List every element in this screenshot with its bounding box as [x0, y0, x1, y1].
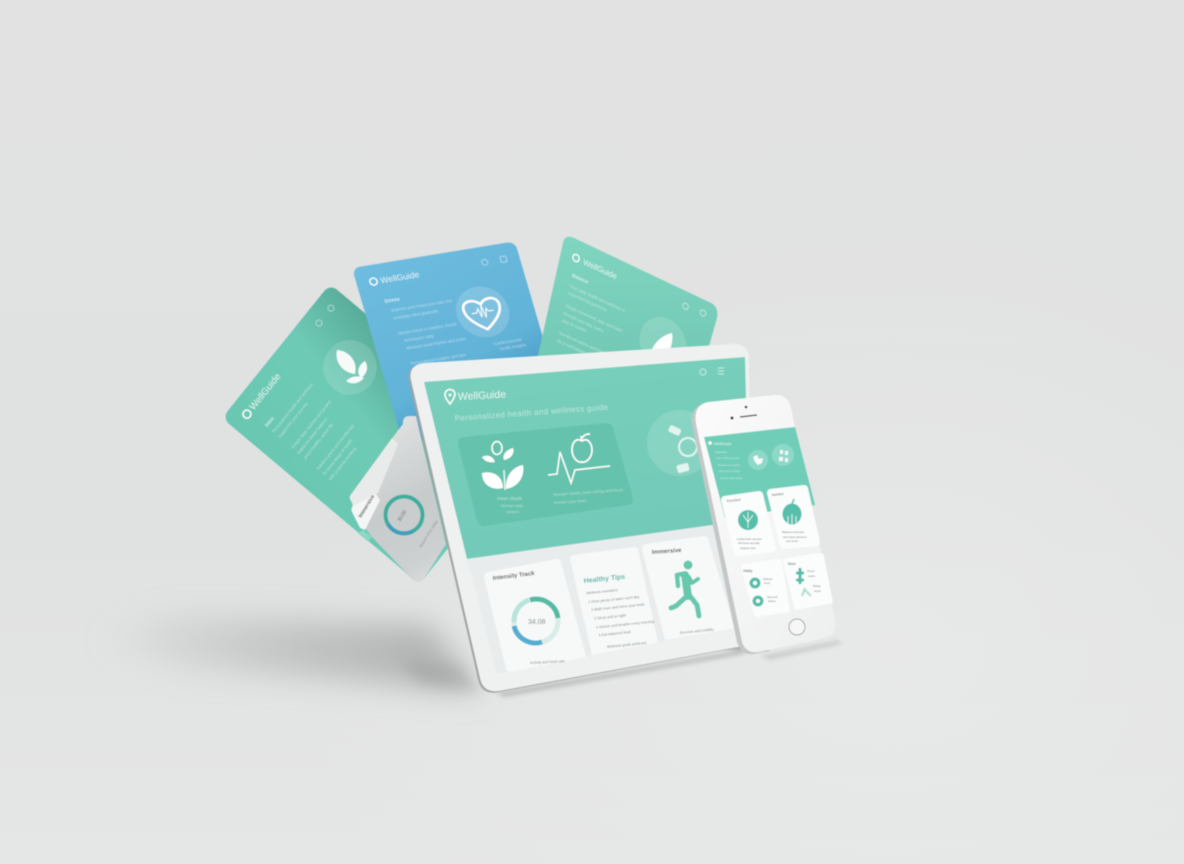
icon: leaf	[651, 333, 672, 354]
plant caption: balance	[506, 510, 519, 514]
phone card: activity: Fitness	[807, 570, 815, 573]
text block: Intro	[264, 416, 276, 428]
icon circle	[635, 309, 691, 378]
phone header text: Heart and nutrition	[719, 469, 741, 473]
text block: techniques daily	[403, 333, 435, 343]
text block: Your daily health and wellness is	[569, 283, 625, 313]
home button	[789, 619, 805, 635]
logo: WellGuide	[582, 257, 618, 281]
phone card: activity: stretch	[814, 590, 822, 593]
tips list: 3 Sleep well at night	[594, 613, 626, 621]
tablet side edge	[409, 345, 750, 693]
phone card: activity: Mobility	[813, 585, 822, 588]
tablet screen: lower area	[467, 520, 749, 674]
text block: Nutrition plans and mindful tips	[315, 423, 355, 471]
text block	[264, 376, 370, 481]
text block: Improve your mood and calm the	[391, 298, 453, 313]
progress ring	[386, 496, 422, 534]
text block	[557, 273, 630, 369]
icon: heart with pulse	[450, 283, 516, 341]
progress ring: 30:00	[397, 509, 408, 523]
phone side edge	[692, 402, 770, 654]
icon: runner	[671, 560, 699, 616]
panel: runner card	[642, 536, 735, 640]
text block: support for your journey	[277, 400, 309, 439]
tips list: 4 Stretch and breathe every morning	[596, 619, 654, 630]
icon: leaves	[336, 350, 367, 383]
heading: Personalized health and wellness guide	[454, 402, 609, 423]
phone header text: Overview	[715, 450, 728, 454]
tips list: Wellness reminders	[586, 588, 618, 595]
tablet body	[411, 344, 752, 691]
phone card: apple: Nutrition	[772, 492, 784, 497]
phone card: activity	[783, 553, 833, 610]
phone card: apple: and recipes tailored to	[783, 536, 807, 539]
icon: plant	[482, 442, 523, 490]
caption: Activity and heart rate	[530, 659, 565, 665]
text block: to improve your health	[412, 362, 455, 374]
text block: with coaching	[415, 372, 442, 381]
small icons	[315, 304, 335, 327]
icon: apple and pulse	[548, 434, 610, 483]
tips list: 1 Drink plenty of water each day	[588, 595, 640, 604]
panel: tips card: Healthy Tips	[583, 574, 626, 585]
caption	[493, 336, 527, 352]
text block: Personalized insights and tips	[410, 352, 466, 366]
plant caption: Nourish daily	[501, 504, 523, 508]
phone card: weights	[741, 559, 790, 617]
phone card: heart	[721, 491, 776, 556]
tips list: 2 Walk more and move your body	[591, 602, 645, 612]
phone card: weights: check	[764, 583, 771, 585]
white tab	[351, 494, 380, 530]
logo	[572, 253, 618, 281]
text block: Stress	[384, 296, 401, 305]
phone card: heart: progress notes	[740, 547, 757, 550]
plant caption: Inner check	[497, 496, 522, 502]
phone header text: Routine summaries	[718, 463, 741, 467]
text block: with progress tracking	[328, 446, 357, 481]
phone header text: Activity goals today	[720, 476, 743, 480]
text block: step of routine	[562, 317, 587, 334]
logo: WellGuide	[379, 269, 421, 285]
tips list: 5 Eat balanced food	[599, 630, 631, 637]
small icons	[481, 256, 507, 266]
pulse caption: Stronger vitality, more energy and focus	[553, 487, 623, 497]
phone card: weights: balance	[768, 601, 777, 603]
panel: donut card	[484, 559, 586, 672]
text block: for a well balanced lifestyle	[557, 338, 604, 364]
phone header text: Daily wellness guide	[716, 456, 740, 460]
phone	[692, 395, 836, 654]
panel: right green card	[537, 237, 717, 401]
phone card: apple	[767, 485, 820, 549]
tablet	[409, 344, 752, 693]
tips list	[586, 585, 655, 638]
phone card: activity: routine	[808, 575, 816, 578]
text block	[384, 288, 476, 383]
phone card: weights: Vitality	[743, 569, 753, 573]
upper sheet	[350, 438, 398, 507]
text block: Measure heart rhythm and pulse	[406, 336, 467, 350]
pulse caption	[553, 487, 623, 505]
text block: Simple check-in routines, breath	[397, 321, 458, 336]
pulse caption: monitor your heart	[554, 498, 587, 505]
phone card: activity: Move	[788, 562, 796, 566]
ground shadows	[95, 615, 842, 697]
icon: dumbbell circle	[647, 410, 713, 476]
panel: tips card	[570, 547, 658, 655]
title: Immersive	[358, 494, 376, 519]
text block: Simple daily routines and guided	[290, 399, 332, 450]
phone card: heart: Exercises	[727, 498, 741, 503]
phone card: heart: with timers and daily	[738, 542, 760, 545]
text block: Personalized health and wellness	[271, 382, 314, 434]
caption: Exercise and mobility	[680, 627, 714, 635]
phone screen header	[704, 427, 815, 518]
logo	[241, 371, 283, 421]
text block: Balance	[572, 273, 589, 285]
panel: donut card: Intensity Track	[493, 571, 536, 582]
logo: WellGuide	[248, 371, 283, 413]
header icons	[700, 368, 724, 375]
panel: blue card	[352, 241, 566, 444]
phone card: apple: your needs	[786, 540, 799, 543]
caption: health insights	[499, 342, 527, 351]
speaker and camera	[730, 406, 757, 420]
phone header circles	[748, 444, 794, 470]
teal corner	[358, 530, 372, 541]
text block: supported by guidance	[568, 290, 608, 313]
text block: Simple movement, plan and track	[565, 303, 623, 334]
phone header text	[715, 450, 743, 480]
caption: Cardiovascular	[493, 337, 523, 346]
donut chart	[514, 599, 558, 643]
plant caption	[497, 496, 523, 514]
phone card: weights: Wellness	[763, 579, 773, 581]
phone logo	[708, 441, 731, 446]
caption: Wellness goals achieved	[607, 641, 646, 649]
panel: runner card: Immersive	[652, 548, 682, 556]
caption: Session timer today	[418, 519, 439, 549]
leaf circle	[312, 329, 388, 406]
text block: through your day, every	[563, 311, 605, 334]
text block: Nutritional advice and habits	[559, 330, 608, 357]
logo: WellGuide	[458, 388, 506, 403]
phone card: apple: Balanced meal plans	[782, 531, 805, 534]
phone card: heart: Guided heart exercises	[737, 538, 762, 541]
panel: left green card	[222, 284, 527, 584]
text block: and a healthy, active life	[302, 421, 335, 460]
donut value: 34.08	[528, 619, 546, 626]
text block: for every stage of health	[321, 437, 354, 476]
panel: gray timer card	[350, 416, 446, 582]
small icons	[682, 301, 706, 318]
phone body	[696, 395, 836, 652]
phone logo: WellGuide	[714, 442, 731, 446]
text block: habits for better balance	[296, 416, 329, 455]
panel: feature	[458, 423, 633, 526]
phone card: weights: Sleep well	[767, 597, 778, 599]
tablet screen: green header	[424, 357, 749, 559]
text block: everyday mind gradually	[393, 308, 440, 320]
